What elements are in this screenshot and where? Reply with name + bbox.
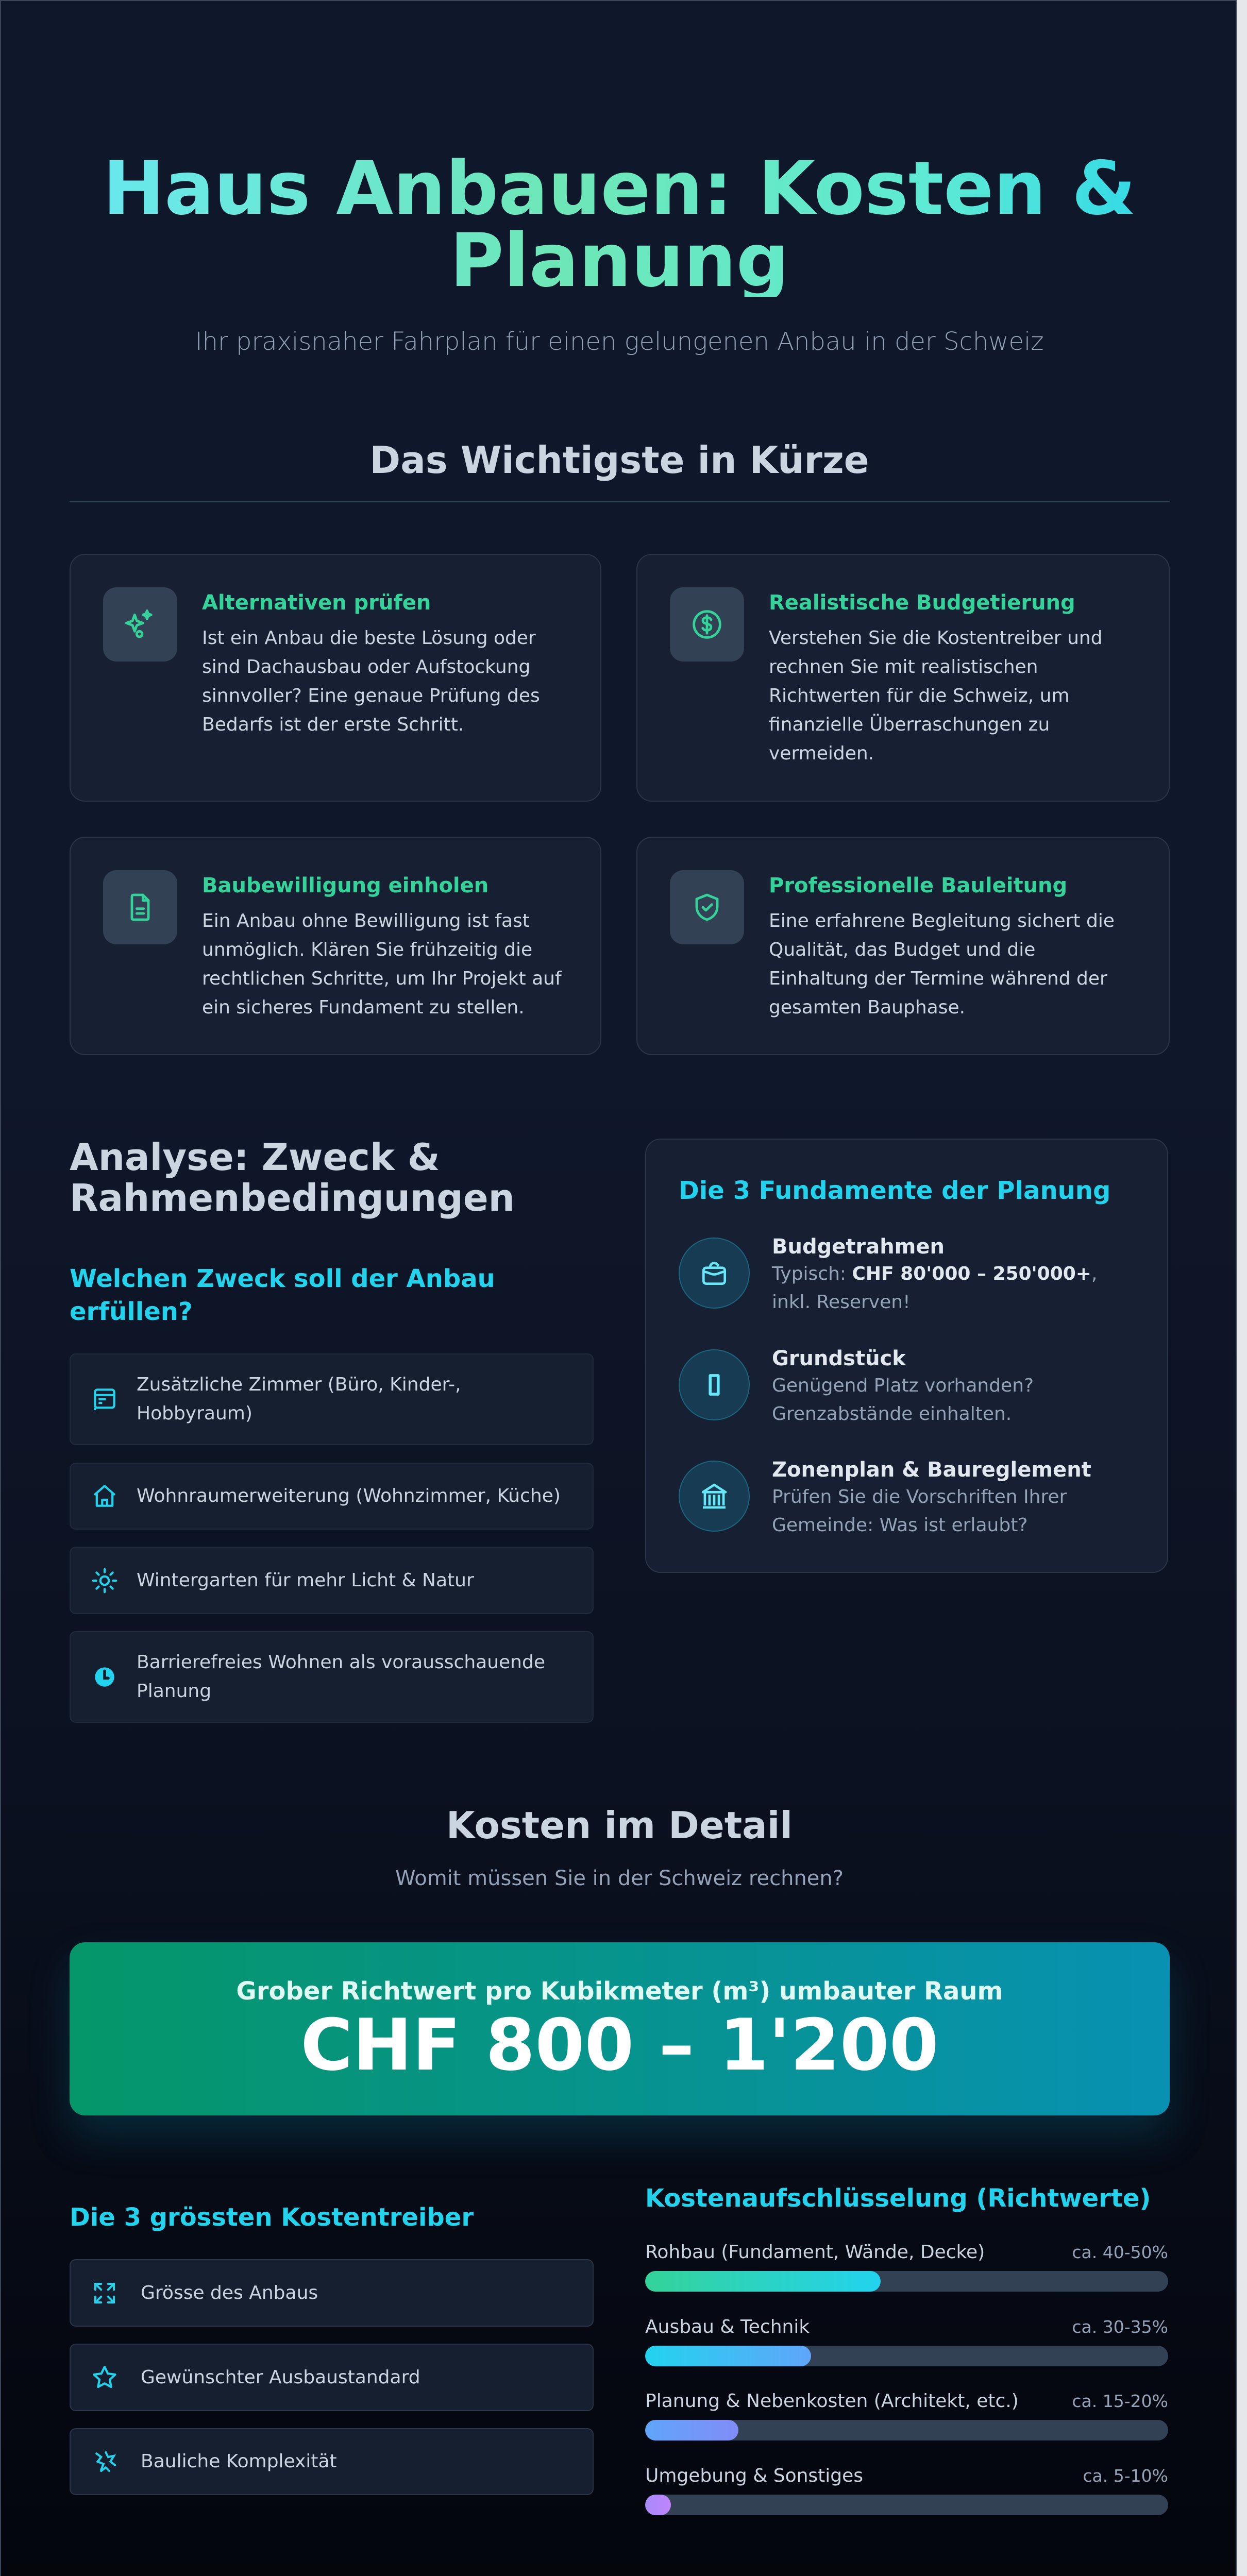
bar: Rohbau: ca. 40-50%: [1072, 2242, 1168, 2262]
icon: star: [93, 2366, 116, 2388]
bar: Ausbau: ca. 30-35%: [1072, 2317, 1168, 2337]
heading: Kostentreiber: Die 3 grössten Kostentreiber: [70, 2203, 474, 2232]
panel heading: Die 3 Fundamente der Planung: [679, 1176, 1110, 1205]
driver: Grösse: Grösse des Anbaus: [141, 2282, 318, 2303]
list item: Wohnraum: [70, 1463, 594, 1530]
icon: sparkles: [103, 587, 177, 662]
subtitle: Ihr praxisnaher Fahrplan für einen gelungenen Anbau in der Schweiz: [195, 327, 1044, 356]
card: Realistische Budgetierung: [636, 554, 1170, 802]
heading: Analyse: Rahmenbedingungen: [70, 1176, 515, 1219]
heading: Analyse: Analyse: Zweck &: [70, 1136, 440, 1179]
driver: Ausbaustandard: [70, 2344, 594, 2411]
fundament: Grundstück: Genügend Platz vorhanden? Grenzabstände einhalten.: [772, 1375, 1034, 1425]
card text: Verstehen Sie die Kostentreiber und rechnen Sie mit realistischen Richtwerten für die Schweiz, um finanzielle Überraschungen zu vermeiden.: [769, 628, 1103, 764]
bar: Planung: [645, 2391, 1168, 2441]
bar: Planung: Planung & Nebenkosten (Architekt, etc.): [645, 2391, 1019, 2412]
icon: wallet: [679, 1238, 750, 1309]
icon: dollar: [670, 587, 744, 662]
card: Alternativen prüfen: [70, 554, 601, 802]
bar: Umgebung: [645, 2465, 1168, 2515]
fundament: Budgetrahmen: Typisch: CHF 80'000 – 250'000+, inkl. Reserven!: [772, 1263, 1097, 1313]
bar: Planung: ca. 15-20%: [1072, 2391, 1168, 2411]
card text: Ist ein Anbau die beste Lösung oder sind Dachausbau oder Aufstockung sinnvoller? Eine genaue Prüfung des Bedarfs ist der erste Schritt.: [202, 628, 540, 735]
card heading: Realistische Budgetierung: [769, 591, 1075, 615]
bar: Umgebung: Umgebung & Sonstiges: [645, 2465, 863, 2486]
bar chart: Kostenaufschlüsselung: [645, 2242, 1168, 2515]
subheading: Zweck: Welchen Zweck soll der Anbau erfüllen?: [70, 1264, 495, 1326]
bar: Rohbau: Rohbau (Fundament, Wände, Decke): [645, 2242, 985, 2263]
list item: Zimmer: Zusätzliche Zimmer (Büro, Kinder-, Hobbyraum): [137, 1374, 461, 1424]
heading: Das Wichtigste in Kürze: Das Wichtigste in Kürze: [369, 438, 869, 482]
callout: Richtwert pro Kubikmeter: [70, 1942, 1170, 2115]
heading: Kosten im Detail: Kosten im Detail: [446, 1804, 793, 1847]
list item: Wohnraum: Wohnraumerweiterung (Wohnzimmer, Küche): [137, 1485, 561, 1506]
fundament: Budgetrahmen: Budgetrahmen: [772, 1235, 945, 1259]
fundament: Zonenplan: [679, 1458, 1091, 1536]
list item: Wintergarten: [70, 1547, 594, 1614]
bar: Ausbau: [645, 2316, 1168, 2366]
list item: Zimmer: [70, 1353, 594, 1445]
icon: expand: [94, 2282, 115, 2304]
heading: Analyse: [70, 1136, 515, 1219]
fundament: Zonenplan: Zonenplan & Baureglement: [772, 1458, 1091, 1482]
subtitle: Kosten: Womit müssen Sie in der Schweiz rechnen?: [395, 1867, 844, 1890]
callout: Richtwert pro Kubikmeter: CHF 800 – 1'200: [300, 2004, 939, 2087]
icon: document: [103, 870, 177, 944]
icon: house: [94, 1485, 115, 1507]
bar: Umgebung: ca. 5-10%: [1083, 2466, 1168, 2486]
fundament: Grundstück: [679, 1347, 1034, 1425]
title: Planung: [450, 217, 789, 303]
panel: Die 3 Fundamente der Planung: [645, 1139, 1168, 1573]
card text: Ein Anbau ohne Bewilligung ist fast unmöglich. Klären Sie frühzeitig die rechtlichen Schritte, um Ihr Projekt auf ein sicheres Fundament zu stellen.: [202, 910, 562, 1018]
list item: Wintergarten: Wintergarten für mehr Licht & Natur: [137, 1569, 474, 1591]
fundament: Grundstück: Grundstück: [772, 1347, 906, 1370]
title: Haus Anbauen: Kosten &: [103, 145, 1136, 231]
bar: Rohbau: [645, 2242, 1168, 2292]
card: Baubewilligung einholen: [70, 837, 601, 1055]
icon: complexity: [95, 2451, 116, 2472]
list item: Barrierefrei: [70, 1631, 594, 1723]
icon: door: [679, 1349, 750, 1420]
icon: card: [94, 1388, 115, 1410]
list item: Barrierefrei: Barrierefreies Wohnen als vorausschauende Planung: [137, 1652, 545, 1702]
driver: Komplexität: [70, 2428, 594, 2495]
fundament: Zonenplan: Prüfen Sie die Vorschriften Ihrer Gemeinde: Was ist erlaubt?: [772, 1486, 1067, 1536]
callout: Richtwert pro Kubikmeter: Grober Richtwert pro Kubikmeter (m³) umbauter Raum: [236, 1977, 1003, 2006]
driver: Grösse: [70, 2259, 594, 2327]
card: Professionelle Bauleitung: [636, 837, 1170, 1055]
icon: shield check: [670, 870, 744, 944]
card text: Eine erfahrene Begleitung sichert die Qualität, das Budget und die Einhaltung der Termine während der gesamten Bauphase.: [769, 910, 1115, 1018]
card heading: Alternativen prüfen: [202, 591, 431, 615]
driver: Ausbaustandard: Gewünschter Ausbaustandard: [141, 2367, 420, 2387]
card heading: Baubewilligung einholen: [202, 874, 488, 897]
driver: Komplexität: Bauliche Komplexität: [141, 2451, 337, 2472]
icon: building: [679, 1461, 750, 1532]
fundament: Budgetrahmen: [679, 1235, 1097, 1313]
icon: accessibility: [95, 1667, 114, 1687]
icon: sun: [92, 1568, 117, 1593]
bar: Ausbau: Ausbau & Technik: [645, 2316, 810, 2337]
title: [1, 152, 1238, 297]
card heading: Professionelle Bauleitung: [769, 874, 1067, 897]
heading: Kostenaufschlüsselung: Kostenaufschlüsselung (Richtwerte): [645, 2184, 1151, 2213]
